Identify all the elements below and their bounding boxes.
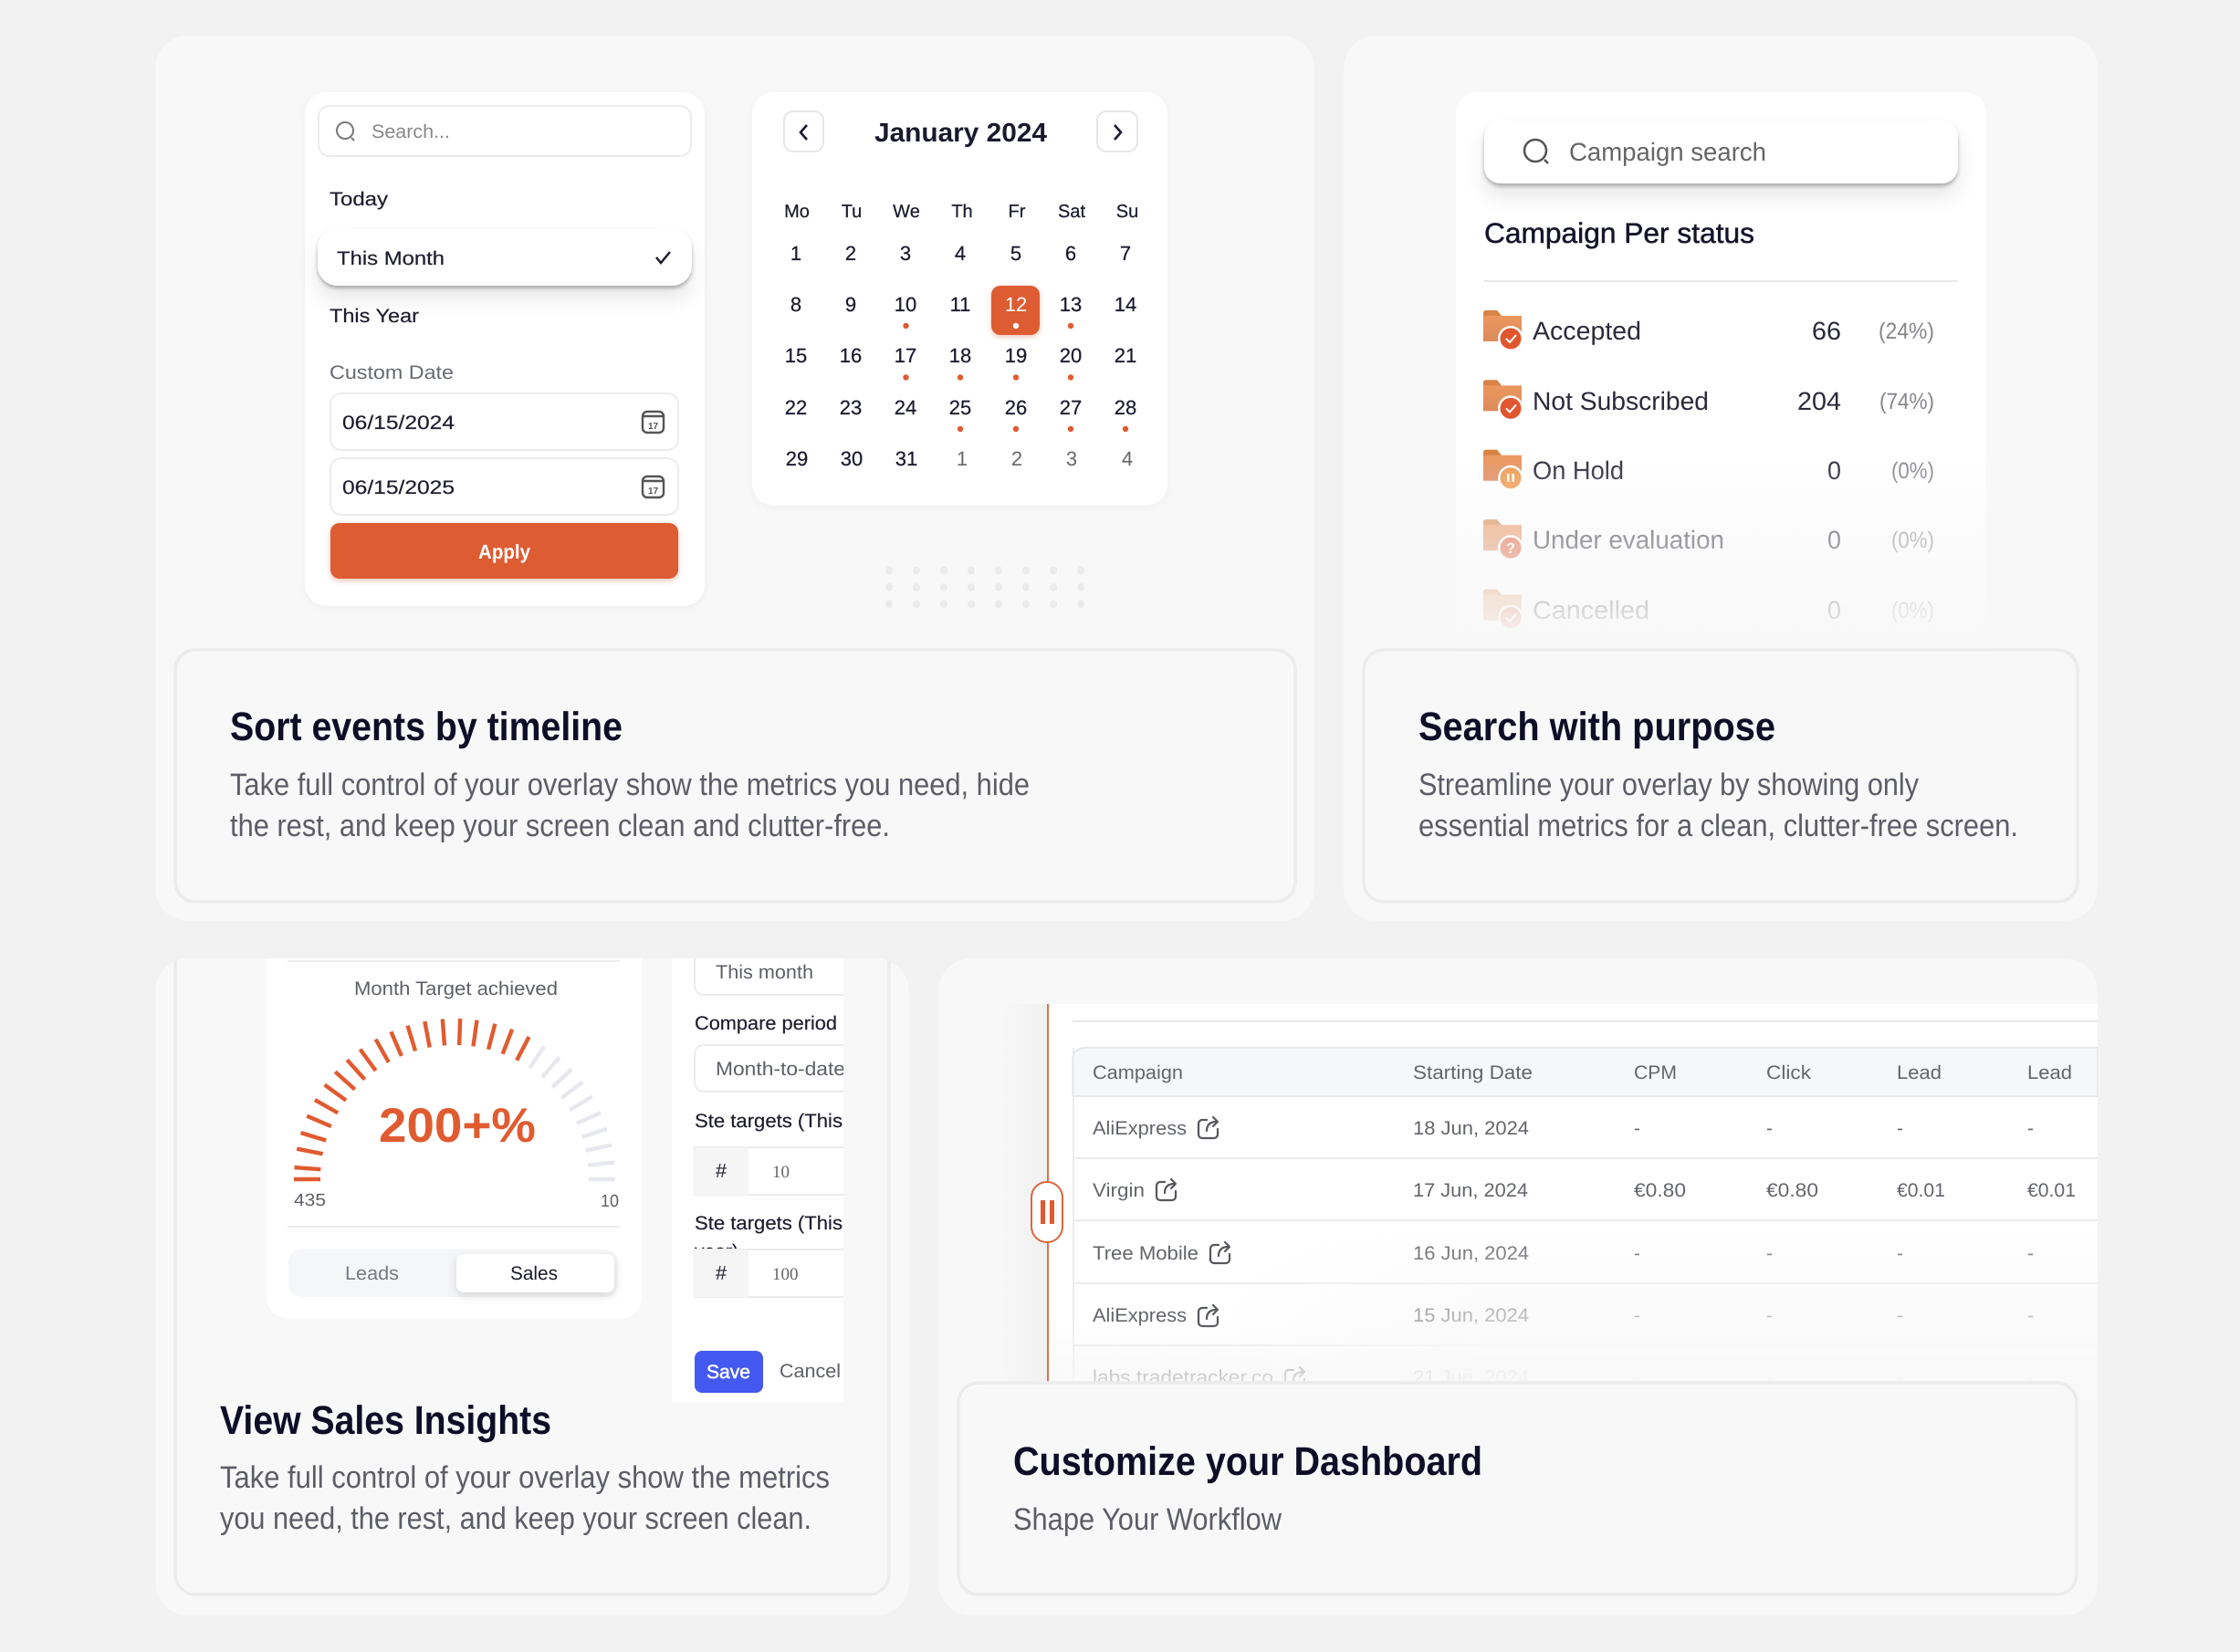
gauge card background — [267, 913, 642, 1319]
panel background — [155, 958, 909, 1615]
calendar day numbers: 20 — [1060, 344, 1082, 367]
table row: tree mobile: - — [1897, 1243, 1903, 1264]
event dots — [903, 323, 1128, 432]
compare label: Compare period — [695, 1013, 837, 1034]
calendar day numbers: 12 — [1005, 293, 1027, 316]
calendar day numbers: 25 — [949, 396, 971, 419]
clipped label continuation: year) — [695, 1241, 738, 1262]
status row: on hold — [1483, 450, 1934, 491]
calendar day numbers: 27 — [1060, 396, 1082, 419]
orange divider line — [1047, 1004, 1049, 1384]
panel background — [938, 958, 2098, 1615]
status row: accepted: (24%) — [1879, 319, 1934, 344]
table header: CPM — [1634, 1062, 1677, 1083]
description — [230, 768, 1030, 843]
table row: aliexpress 15 jun: - — [1897, 1305, 1903, 1326]
status row: under evaluation — [1483, 519, 1934, 560]
cancel button: Cancel — [780, 1361, 841, 1382]
table header: Click — [1766, 1062, 1812, 1083]
gauge divider bottom — [288, 1226, 620, 1228]
heading: Customize your Dashboard — [1013, 1439, 1482, 1484]
table row: tree mobile: 16 Jun, 2024 — [1413, 1243, 1529, 1264]
targets form card — [694, 958, 843, 1393]
fade overlay: right — [1052, 1223, 2098, 1406]
calendar day numbers: 5 — [1010, 242, 1021, 265]
calendar day numbers: 29 — [786, 447, 808, 470]
left shade — [1000, 1004, 1049, 1381]
calendar day numbers: 4 — [955, 242, 966, 265]
description: you need, the rest, and keep your screen clean. — [220, 1501, 811, 1536]
panel background — [1344, 36, 2098, 921]
period input: This month — [716, 962, 813, 983]
leads sales tabs: Sales — [510, 1263, 558, 1284]
table row: aliexpress 15 jun — [1093, 1305, 2034, 1326]
status row: not subscribed: 204 — [1797, 387, 1841, 415]
status row: under evaluation: Under evaluation — [1533, 526, 1724, 554]
selected day highlight — [991, 286, 1040, 335]
table row: labs tradetracker: 21 Jun, 2024 — [1413, 1367, 1529, 1388]
description: the rest, and keep your screen clean and clutter-free. — [230, 809, 890, 843]
calendar day numbers: 23 — [840, 396, 862, 419]
calendar day numbers: 16 — [840, 344, 862, 367]
status divider — [1484, 280, 1958, 282]
table header — [1073, 1048, 2098, 1096]
table row: aliexpress 15 jun: - — [2027, 1305, 2034, 1326]
description — [220, 1460, 830, 1536]
campaign search box — [1484, 120, 1958, 183]
calendar day numbers: 26 — [1005, 396, 1027, 419]
table row: aliexpress 18 jun: - — [1634, 1118, 1640, 1139]
search input — [319, 106, 691, 156]
calendar day numbers: 19 — [1005, 344, 1027, 367]
caption card — [958, 1383, 2077, 1594]
table row: virgin: €0.80 — [1766, 1180, 1818, 1201]
status row: accepted — [1483, 310, 1934, 351]
table header: Starting Date — [1413, 1062, 1533, 1083]
table row: virgin: Virgin — [1093, 1180, 1145, 1201]
option: this month selected — [318, 228, 692, 286]
weekday headers: Su — [1116, 202, 1138, 222]
monthly target input: # — [716, 1159, 727, 1182]
period input — [694, 958, 843, 996]
form background — [672, 949, 843, 1402]
description: Streamline your overlay by showing only — [1418, 768, 1919, 802]
dashboard table widget — [1072, 1020, 2098, 1382]
monthly target input: 10 — [772, 1163, 790, 1182]
campaign status card — [1456, 92, 1986, 663]
table row: labs tradetracker: - — [1897, 1367, 1903, 1388]
search input: Search... — [372, 121, 450, 142]
calendar day numbers: 1 — [790, 242, 801, 265]
table row: aliexpress 15 jun: 15 Jun, 2024 — [1413, 1305, 1529, 1326]
top divider — [1073, 1020, 2098, 1022]
description: Take full control of your overlay show the metrics you need, hide — [230, 768, 1030, 802]
option: this month selected: This Month — [337, 248, 445, 269]
calendar day numbers: 31 — [895, 447, 917, 470]
description: essential metrics for a clean, clutter-free screen. — [1418, 809, 2018, 843]
apply button: Apply — [478, 540, 531, 563]
status heading: Campaign Per status — [1484, 217, 1754, 249]
gauge card — [294, 980, 619, 1297]
calendar day numbers: 21 — [1115, 344, 1136, 367]
calendar day numbers: 15 — [785, 344, 807, 367]
table row: virgin: €0.01 — [2027, 1180, 2076, 1201]
status row: accepted: 66 — [1812, 317, 1841, 345]
compare input — [694, 1044, 843, 1093]
status row: cancelled: 0 — [1827, 596, 1841, 624]
table frame lines — [1073, 1048, 2098, 1395]
description: Shape Your Workflow — [1013, 1502, 1282, 1537]
table row: aliexpress 18 jun: - — [2027, 1118, 2034, 1139]
caption card — [1364, 650, 2078, 902]
calendar day numbers: 2 — [845, 242, 856, 265]
status row: cancelled — [1483, 590, 1934, 631]
table row: aliexpress 15 jun: - — [1634, 1305, 1640, 1326]
table row: aliexpress 18 jun: 18 Jun, 2024 — [1413, 1118, 1529, 1139]
calendar day numbers: 18 — [949, 344, 971, 367]
yearly target label: Ste targets (This — [695, 1213, 843, 1234]
calendar day numbers: 6 — [1065, 242, 1076, 265]
save button: Save — [707, 1362, 750, 1383]
status row: not subscribed: Not Subscribed — [1533, 387, 1709, 415]
date filter card background — [305, 92, 705, 606]
caption card frame — [175, 913, 889, 1594]
table row: labs tradetracker: - — [2027, 1367, 2034, 1388]
calendar card background — [752, 92, 1167, 506]
status row: accepted: Accepted — [1533, 317, 1641, 345]
date filter card — [305, 92, 705, 606]
date input: start: 06/15/2024 — [342, 413, 455, 434]
table header: Campaign — [1093, 1062, 1183, 1083]
yearly target input — [694, 1249, 843, 1298]
status row: under evaluation: (0%) — [1891, 528, 1934, 553]
yearly target input: 100 — [772, 1265, 798, 1284]
status row: under evaluation: 0 — [1827, 526, 1841, 554]
weekday headers: Mo — [784, 202, 810, 222]
weekday headers — [784, 202, 1138, 222]
table row: virgin — [1093, 1179, 2076, 1201]
weekday headers: Tu — [842, 202, 862, 222]
status row: on hold: On Hold — [1533, 456, 1624, 485]
heading: Search with purpose — [1418, 705, 1775, 749]
date input: end: 06/15/2025 — [342, 477, 455, 498]
panel background — [155, 36, 1314, 921]
status row: not subscribed — [1483, 380, 1934, 421]
calendar day numbers: 24 — [895, 396, 916, 419]
save button — [695, 1351, 763, 1393]
calendar day numbers: 4 — [1122, 447, 1133, 470]
calendar day numbers — [785, 242, 1136, 470]
gauge min label: 435 — [294, 1191, 326, 1210]
gauge max label: 10 — [601, 1192, 619, 1211]
calendar day numbers: 17 — [895, 344, 916, 367]
panel: search with purpose — [1344, 36, 2098, 921]
weekday headers: We — [893, 202, 920, 222]
status row: under evaluation: ? — [1506, 541, 1515, 557]
table row: aliexpress 18 jun: - — [1766, 1118, 1773, 1139]
leads sales tabs: Leads — [345, 1263, 399, 1284]
gauge ticks — [294, 1019, 615, 1179]
fade overlay — [1424, 452, 2017, 648]
table row: labs tradetracker: - — [1766, 1367, 1773, 1388]
option: today: Today — [330, 189, 389, 210]
heading: View Sales Insights — [220, 1398, 551, 1443]
gauge value: 200+% — [379, 1099, 536, 1153]
table row: tree mobile: - — [1766, 1243, 1773, 1264]
table row: aliexpress 18 jun — [1093, 1117, 2034, 1139]
table row: tree mobile: - — [2027, 1243, 2034, 1264]
calendar day numbers: 2 — [1011, 447, 1022, 470]
weekday headers: Fr — [1009, 202, 1026, 222]
weekday headers: Th — [951, 202, 973, 222]
status row: on hold: 0 — [1827, 456, 1841, 485]
gauge divider top — [288, 960, 620, 962]
date input: start — [330, 393, 678, 450]
status row: on hold: (0%) — [1891, 458, 1934, 484]
compare input: Month-to-date — [716, 1059, 845, 1080]
table row: virgin: €0.80 — [1634, 1180, 1686, 1201]
table row: aliexpress 15 jun: - — [1766, 1305, 1773, 1326]
calendar day numbers: 10 — [895, 293, 916, 316]
calendar day numbers: 13 — [1060, 293, 1082, 316]
panel: sort events by timeline — [155, 36, 1314, 921]
heading: Sort events by timeline — [230, 705, 623, 749]
weekday headers: Sat — [1058, 202, 1085, 222]
calendar day numbers: 3 — [1066, 447, 1077, 470]
caption card — [175, 650, 1295, 902]
calendar day numbers: 22 — [785, 396, 807, 419]
calendar day numbers: 1 — [957, 447, 968, 470]
monthly target input — [694, 1146, 843, 1196]
table row: tree mobile — [1093, 1242, 2034, 1264]
campaign card background — [1456, 92, 1986, 663]
calendar day numbers: 11 — [950, 293, 970, 316]
table row: virgin: 17 Jun, 2024 — [1413, 1180, 1528, 1201]
description: Take full control of your overlay show the metrics — [220, 1460, 830, 1495]
fade overlay: bottom — [1052, 1323, 2098, 1406]
next month button — [1097, 111, 1137, 152]
previous month button — [784, 111, 823, 152]
leads sales tabs — [288, 1249, 618, 1297]
pause handle — [1031, 1182, 1062, 1242]
calendar month title: January 2024 — [874, 119, 1047, 148]
custom date label: Custom Date — [330, 362, 454, 383]
status row: not subscribed: (74%) — [1879, 389, 1934, 414]
table header: Lead — [2027, 1062, 2072, 1083]
table row: labs tradetracker: labs.tradetracker.co — [1093, 1367, 1273, 1388]
calendar day numbers: 8 — [790, 293, 801, 316]
table row: aliexpress 18 jun: - — [1897, 1118, 1903, 1139]
panel: view sales insights — [220, 958, 843, 1535]
table row: labs tradetracker: - — [1634, 1367, 1640, 1388]
apply button — [330, 523, 678, 579]
calendar day numbers: 9 — [845, 293, 856, 316]
table row: virgin: €0.01 — [1897, 1180, 1945, 1201]
date input: start: 17 — [648, 422, 658, 432]
table row: tree mobile: - — [1634, 1243, 1640, 1264]
calendar card — [752, 92, 1167, 506]
dot pattern — [885, 566, 1084, 608]
calendar day numbers: 28 — [1115, 396, 1136, 419]
status row: cancelled: (0%) — [1891, 598, 1934, 623]
option: this year: This Year — [330, 306, 419, 327]
gauge title: Month Target achieved — [354, 978, 558, 999]
status row: cancelled: Cancelled — [1533, 596, 1649, 624]
yearly target input: # — [716, 1261, 727, 1284]
panel: customize your dashboard — [1015, 1004, 2098, 1536]
calendar day numbers: 7 — [1120, 242, 1131, 265]
calendar day numbers: 30 — [841, 447, 863, 470]
description — [1418, 768, 2018, 843]
date input: end: 17 — [648, 486, 658, 497]
table header: Lead — [1897, 1062, 1942, 1083]
monthly target label: Ste targets (This — [695, 1111, 843, 1132]
campaign search box: Campaign search — [1569, 138, 1766, 166]
table row: aliexpress 15 jun: AliExpress — [1093, 1305, 1187, 1326]
date input: end — [330, 458, 678, 515]
widget background — [1049, 1004, 2098, 1406]
table row: labs tradetracker — [1094, 1366, 1526, 1382]
table row: tree mobile: Tree Mobile — [1093, 1243, 1199, 1264]
calendar day numbers: 3 — [900, 242, 911, 265]
table row: aliexpress 18 jun: AliExpress — [1093, 1118, 1187, 1139]
calendar day numbers: 14 — [1115, 293, 1136, 316]
